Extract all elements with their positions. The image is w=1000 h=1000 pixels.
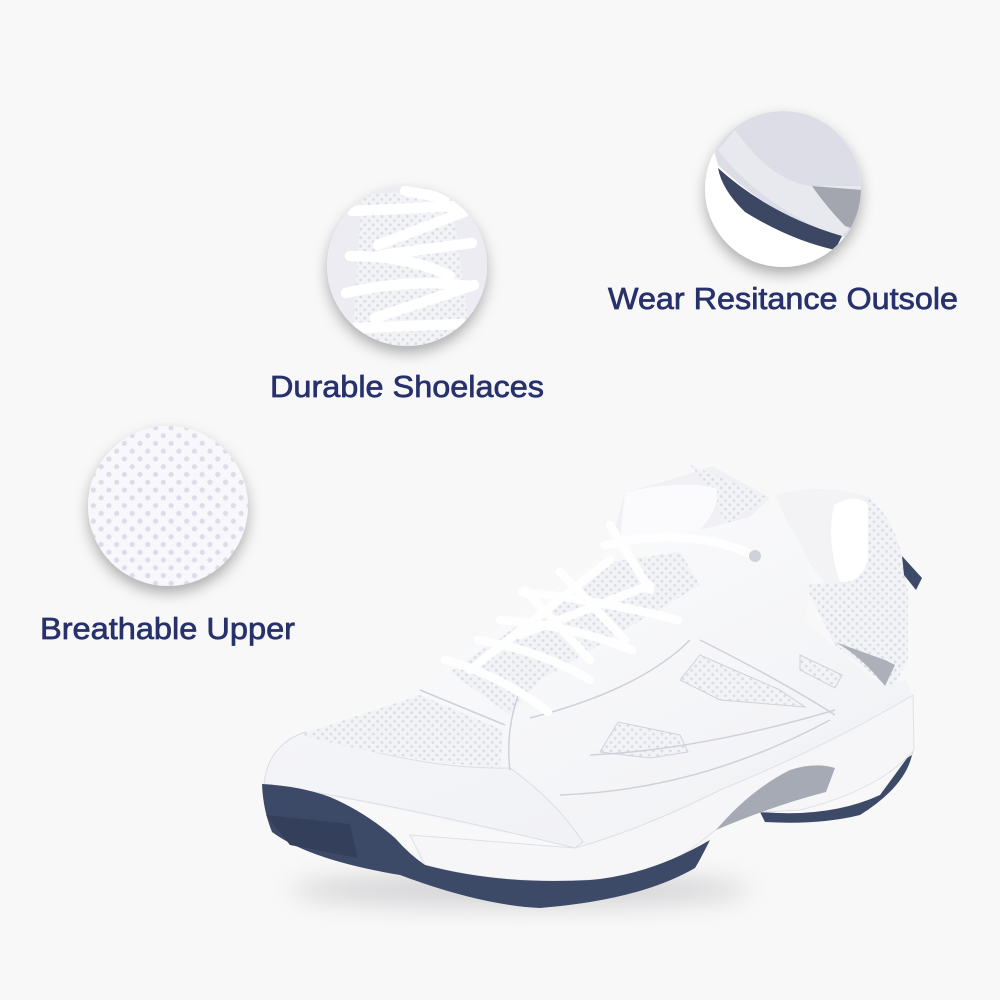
stitching bbox=[420, 640, 835, 795]
collar bbox=[775, 489, 880, 590]
heel outsole bbox=[760, 750, 913, 823]
detail circle: mesh upper bbox=[88, 426, 248, 586]
heel mesh bbox=[805, 498, 908, 690]
detail circle: outsole bbox=[700, 100, 870, 267]
ground shadow bbox=[290, 872, 750, 908]
main upper bbox=[262, 512, 914, 845]
forefoot mesh bbox=[300, 695, 503, 768]
toe cap bbox=[264, 732, 583, 848]
heading: Durable Shoelaces: Durable Shoelaces bbox=[270, 369, 544, 404]
outsole tread bbox=[266, 815, 358, 858]
midsole bbox=[410, 695, 914, 881]
shoe photo illustration bbox=[262, 465, 922, 908]
detail circle: shoelaces bbox=[327, 186, 487, 346]
heading: Wear Resitance Outsole: Wear Resitance Outsole bbox=[608, 281, 958, 316]
side panels bbox=[680, 655, 805, 707]
front outsole bbox=[262, 784, 710, 908]
lace mesh panel bbox=[450, 552, 700, 715]
tongue bbox=[612, 466, 770, 590]
laces bbox=[445, 525, 755, 712]
heading: Breathable Upper: Breathable Upper bbox=[40, 611, 295, 646]
